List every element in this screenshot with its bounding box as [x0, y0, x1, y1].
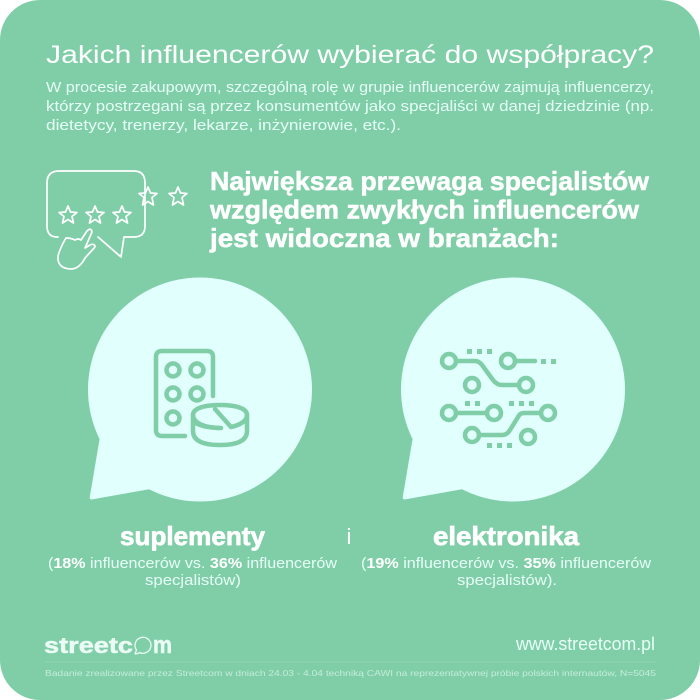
label: electronics: elektronika	[433, 521, 580, 551]
heading: biggest advantage of specialists: jest widoczna w branżach:	[209, 223, 559, 253]
title: Jakich influencerów wybierać do współpracy?	[46, 41, 654, 69]
supplements statistic: (18% influencerów vs. 36% influencerów	[48, 555, 337, 572]
logo: streetcom: streetc	[44, 633, 133, 658]
supplements statistic: specjalistów)	[145, 572, 241, 589]
heading: biggest advantage of specialists	[209, 166, 650, 253]
survey source note: Badanie zrealizowane przez Streetcom w dniach 24.03 - 4.04 techniką CAWI na reprezentatywnej próbie polskich internautów, N=5045	[45, 668, 656, 678]
icon: circuit traces	[442, 354, 555, 444]
logo: streetcom: m	[153, 632, 172, 659]
speech bubble: electronics	[401, 278, 625, 502]
footer divider	[45, 661, 656, 663]
website: www.streetcom.pl	[515, 634, 655, 654]
intro paragraph	[46, 79, 654, 134]
supplements statistic	[48, 555, 337, 589]
electronics statistic: specjalistów).	[457, 572, 557, 589]
electronics statistic	[361, 555, 651, 589]
speech bubble: supplements	[88, 278, 312, 502]
icon: pills blister pack	[156, 351, 247, 445]
connector letter: i	[347, 524, 351, 549]
icon details: circuit dots	[465, 349, 556, 448]
icon: rating speech bubble with stars and hand	[47, 171, 187, 269]
intro paragraph: W procesie zakupowym, szczególną rolę w grupie influencerów zajmują influencerzy,	[46, 79, 654, 96]
heading: biggest advantage of specialists: względem zwykłych influencerów	[209, 194, 640, 224]
intro paragraph: którzy postrzegani są przez konsumentów jako specjaliści w danej dziedzinie (np.	[46, 98, 654, 115]
electronics statistic: (19% influencerów vs. 35% influencerów	[361, 555, 651, 572]
label: supplements: suplementy	[120, 521, 266, 551]
logo: streetcom	[44, 632, 172, 659]
intro paragraph: dietetycy, trenerzy, lekarze, inżynierowie, etc.).	[46, 117, 401, 134]
heading: biggest advantage of specialists: Największa przewaga specjalistów	[210, 166, 650, 196]
